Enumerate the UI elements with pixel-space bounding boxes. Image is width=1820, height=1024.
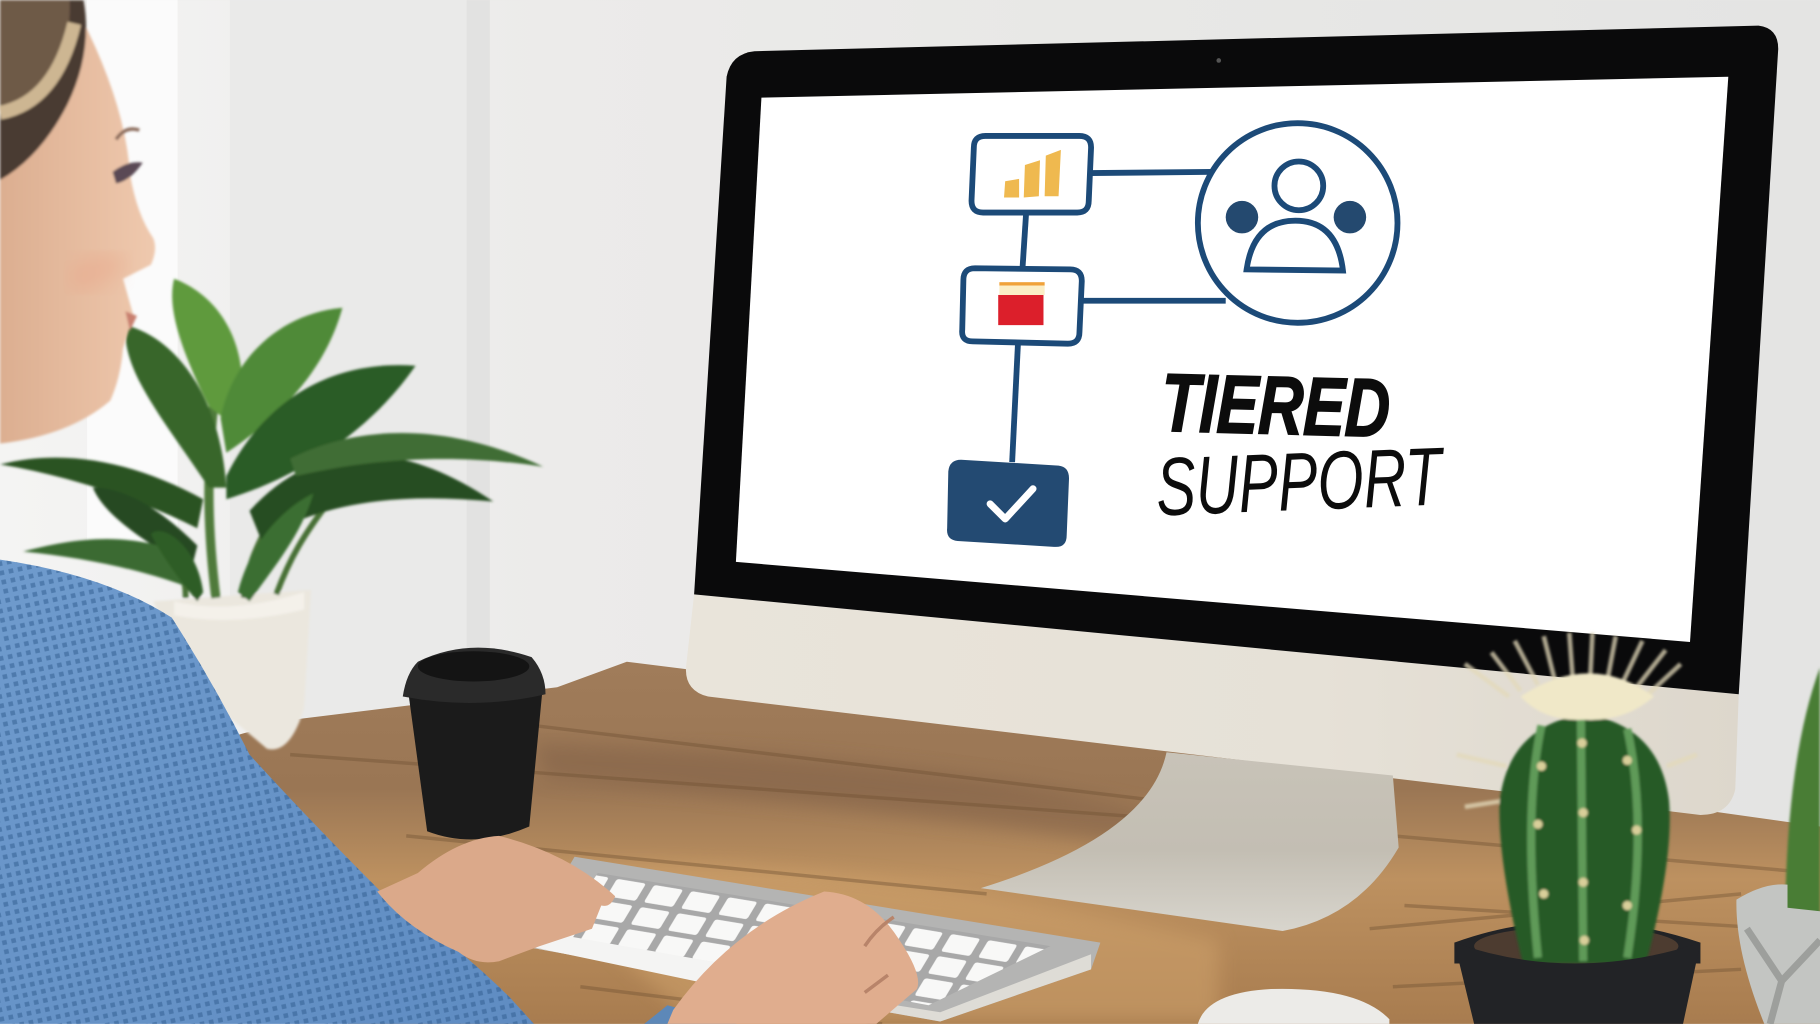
heading: TIERED SUPPORT: TIERED <box>1160 357 1391 455</box>
keyboard <box>522 857 1100 1022</box>
tier 1 box: bar chart icon <box>972 136 1091 213</box>
monitor stand <box>981 752 1399 931</box>
heading: TIERED SUPPORT <box>1154 357 1447 533</box>
person: face and hair <box>0 0 155 444</box>
cactus in pot <box>1454 633 1700 1024</box>
monitor bezel <box>694 26 1778 694</box>
monitor chin and body <box>686 594 1739 815</box>
monitor screen <box>736 77 1728 642</box>
plant <box>0 279 543 749</box>
mouse <box>1198 989 1389 1024</box>
connector lines <box>1012 172 1226 462</box>
tier 2 box: red card icon <box>962 268 1082 344</box>
circle users icon <box>1198 123 1398 323</box>
person: hands <box>377 836 918 1024</box>
resolved box: check mark <box>947 460 1069 547</box>
wooden desk <box>209 662 1820 1024</box>
person: shirt <box>0 560 737 1024</box>
second plant at right edge <box>1736 668 1820 1024</box>
heading: TIERED SUPPORT: SUPPORT <box>1154 430 1447 533</box>
coffee cup <box>403 648 546 839</box>
